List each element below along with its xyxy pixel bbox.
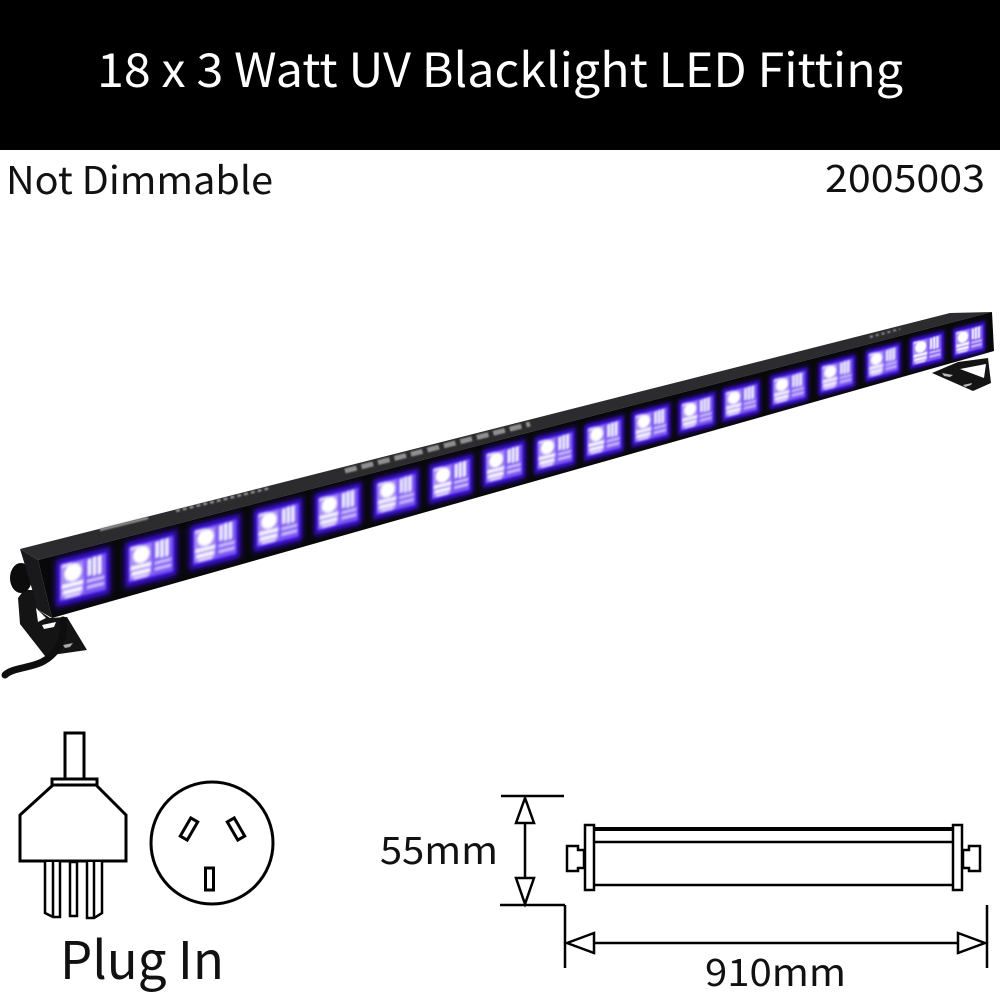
- width label: 910mm: [705, 942, 846, 997]
- LED 5: [315, 482, 361, 536]
- LED 11: [632, 403, 670, 447]
- title banner: [0, 0, 1000, 150]
- plug type label: Plug In: [60, 919, 224, 994]
- LED 4: [254, 498, 302, 552]
- LED 1: [56, 547, 110, 607]
- bar outline: [567, 825, 980, 890]
- dimension drawing: [380, 796, 987, 997]
- LED 14: [770, 367, 808, 409]
- LED 9: [534, 427, 576, 475]
- LED 12: [678, 391, 716, 435]
- left bracket and cable: [5, 563, 87, 675]
- height dimension: [500, 796, 565, 905]
- dimmable note: Not Dimmable: [6, 150, 273, 205]
- LED 6: [373, 468, 419, 520]
- LED 7: [429, 454, 473, 504]
- LED 17: [910, 331, 944, 369]
- front face of housing: [38, 312, 994, 618]
- icon: socket: [151, 782, 273, 904]
- LED 2: [125, 530, 177, 588]
- LED 10: [584, 415, 624, 461]
- LED 8: [483, 440, 525, 488]
- printed markings: [100, 329, 900, 530]
- product code: 2005003: [825, 148, 985, 203]
- LED 18: [953, 321, 985, 359]
- left end cap: [20, 549, 52, 618]
- title: 18 x 3 Watt UV Blacklight LED Fitting: [97, 32, 903, 101]
- icon: plug: [20, 733, 126, 918]
- LED 3: [190, 514, 240, 570]
- LED 13: [722, 380, 760, 422]
- width dimension: [565, 905, 987, 968]
- top surface of housing: [20, 312, 992, 560]
- product photo: LED bar: [5, 312, 994, 675]
- right bracket: [932, 358, 991, 391]
- height label: 55mm: [380, 820, 498, 875]
- LED 16: [865, 342, 901, 382]
- LED 15: [819, 354, 855, 396]
